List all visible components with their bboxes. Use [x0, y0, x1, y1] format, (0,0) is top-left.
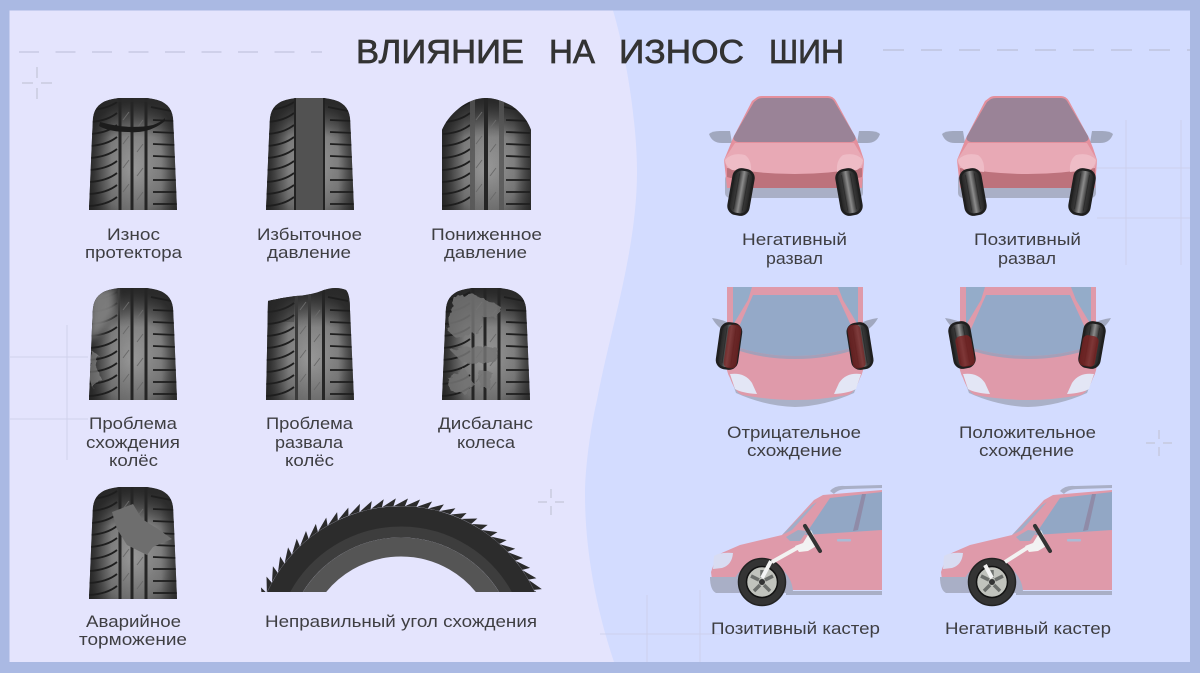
title: ИЗНОС — [619, 33, 744, 70]
label: over-inflation: Избыточное — [257, 226, 362, 244]
label: wheel imbalance — [438, 415, 533, 452]
label: toe problem: Проблема — [89, 415, 178, 433]
car: positive toe — [945, 287, 1111, 407]
label: negative camber: развал — [766, 250, 823, 268]
label: emergency braking: Аварийное — [86, 613, 181, 631]
label: tread wear: Износ — [107, 226, 160, 244]
label: camber problem: Проблема — [266, 415, 354, 433]
tire: under-inflation — [442, 98, 532, 210]
car: negative caster — [940, 485, 1112, 606]
label: wheel imbalance: колеса — [457, 434, 516, 452]
label: over-inflation: давление — [267, 244, 351, 262]
label: emergency braking: торможение — [79, 631, 187, 649]
label: toe problem: схождения — [86, 434, 180, 452]
tire: tread wear — [89, 98, 179, 210]
car: negative camber — [709, 96, 880, 216]
label: positive toe: схождение — [979, 442, 1074, 460]
label: wheel imbalance: Дисбаланс — [438, 415, 533, 433]
car: positive caster — [710, 485, 882, 606]
label: camber problem: развала — [275, 434, 344, 452]
label: positive caster: Позитивный кастер — [711, 620, 880, 638]
label: negative camber — [742, 231, 847, 268]
label: wrong toe angle: Неправильный угол схождения — [265, 613, 537, 631]
label: toe problem: колёс — [109, 452, 158, 470]
title: ВЛИЯНИЕ — [356, 33, 524, 70]
label: under-inflation — [431, 226, 542, 262]
label: negative caster: Негативный кастер — [945, 620, 1111, 638]
label: negative toe — [727, 424, 861, 460]
label: tread wear — [85, 226, 183, 262]
label: positive camber: развал — [998, 250, 1056, 268]
title — [356, 33, 844, 70]
label: camber problem: колёс — [285, 452, 334, 470]
label: positive toe — [959, 424, 1096, 460]
title: НА — [549, 33, 595, 70]
label: negative camber: Негативный — [742, 231, 847, 249]
tire: over-inflation — [266, 98, 356, 210]
tire: wheel imbalance — [442, 288, 532, 400]
car: positive camber — [942, 96, 1113, 216]
label: negative toe: схождение — [747, 442, 842, 460]
label: toe problem — [86, 415, 180, 470]
tire: camber problem — [266, 288, 356, 400]
label: over-inflation — [257, 226, 362, 262]
tire: side arc with sawtooth tread — [260, 498, 542, 592]
label: positive camber — [974, 231, 1081, 268]
label: emergency braking — [79, 613, 187, 649]
label: positive camber: Позитивный — [974, 231, 1081, 249]
label: under-inflation: давление — [444, 244, 527, 262]
label: under-inflation: Пониженное — [431, 226, 542, 244]
tire: emergency braking — [89, 487, 179, 599]
car: negative toe — [712, 287, 878, 407]
title: ШИН — [769, 33, 844, 70]
label: tread wear: протектора — [85, 244, 183, 262]
label: positive toe: Положительное — [959, 424, 1096, 442]
label: negative toe: Отрицательное — [727, 424, 861, 442]
panel: left background — [10, 10, 637, 662]
tire: toe problem — [89, 288, 179, 400]
label: camber problem — [266, 415, 354, 470]
